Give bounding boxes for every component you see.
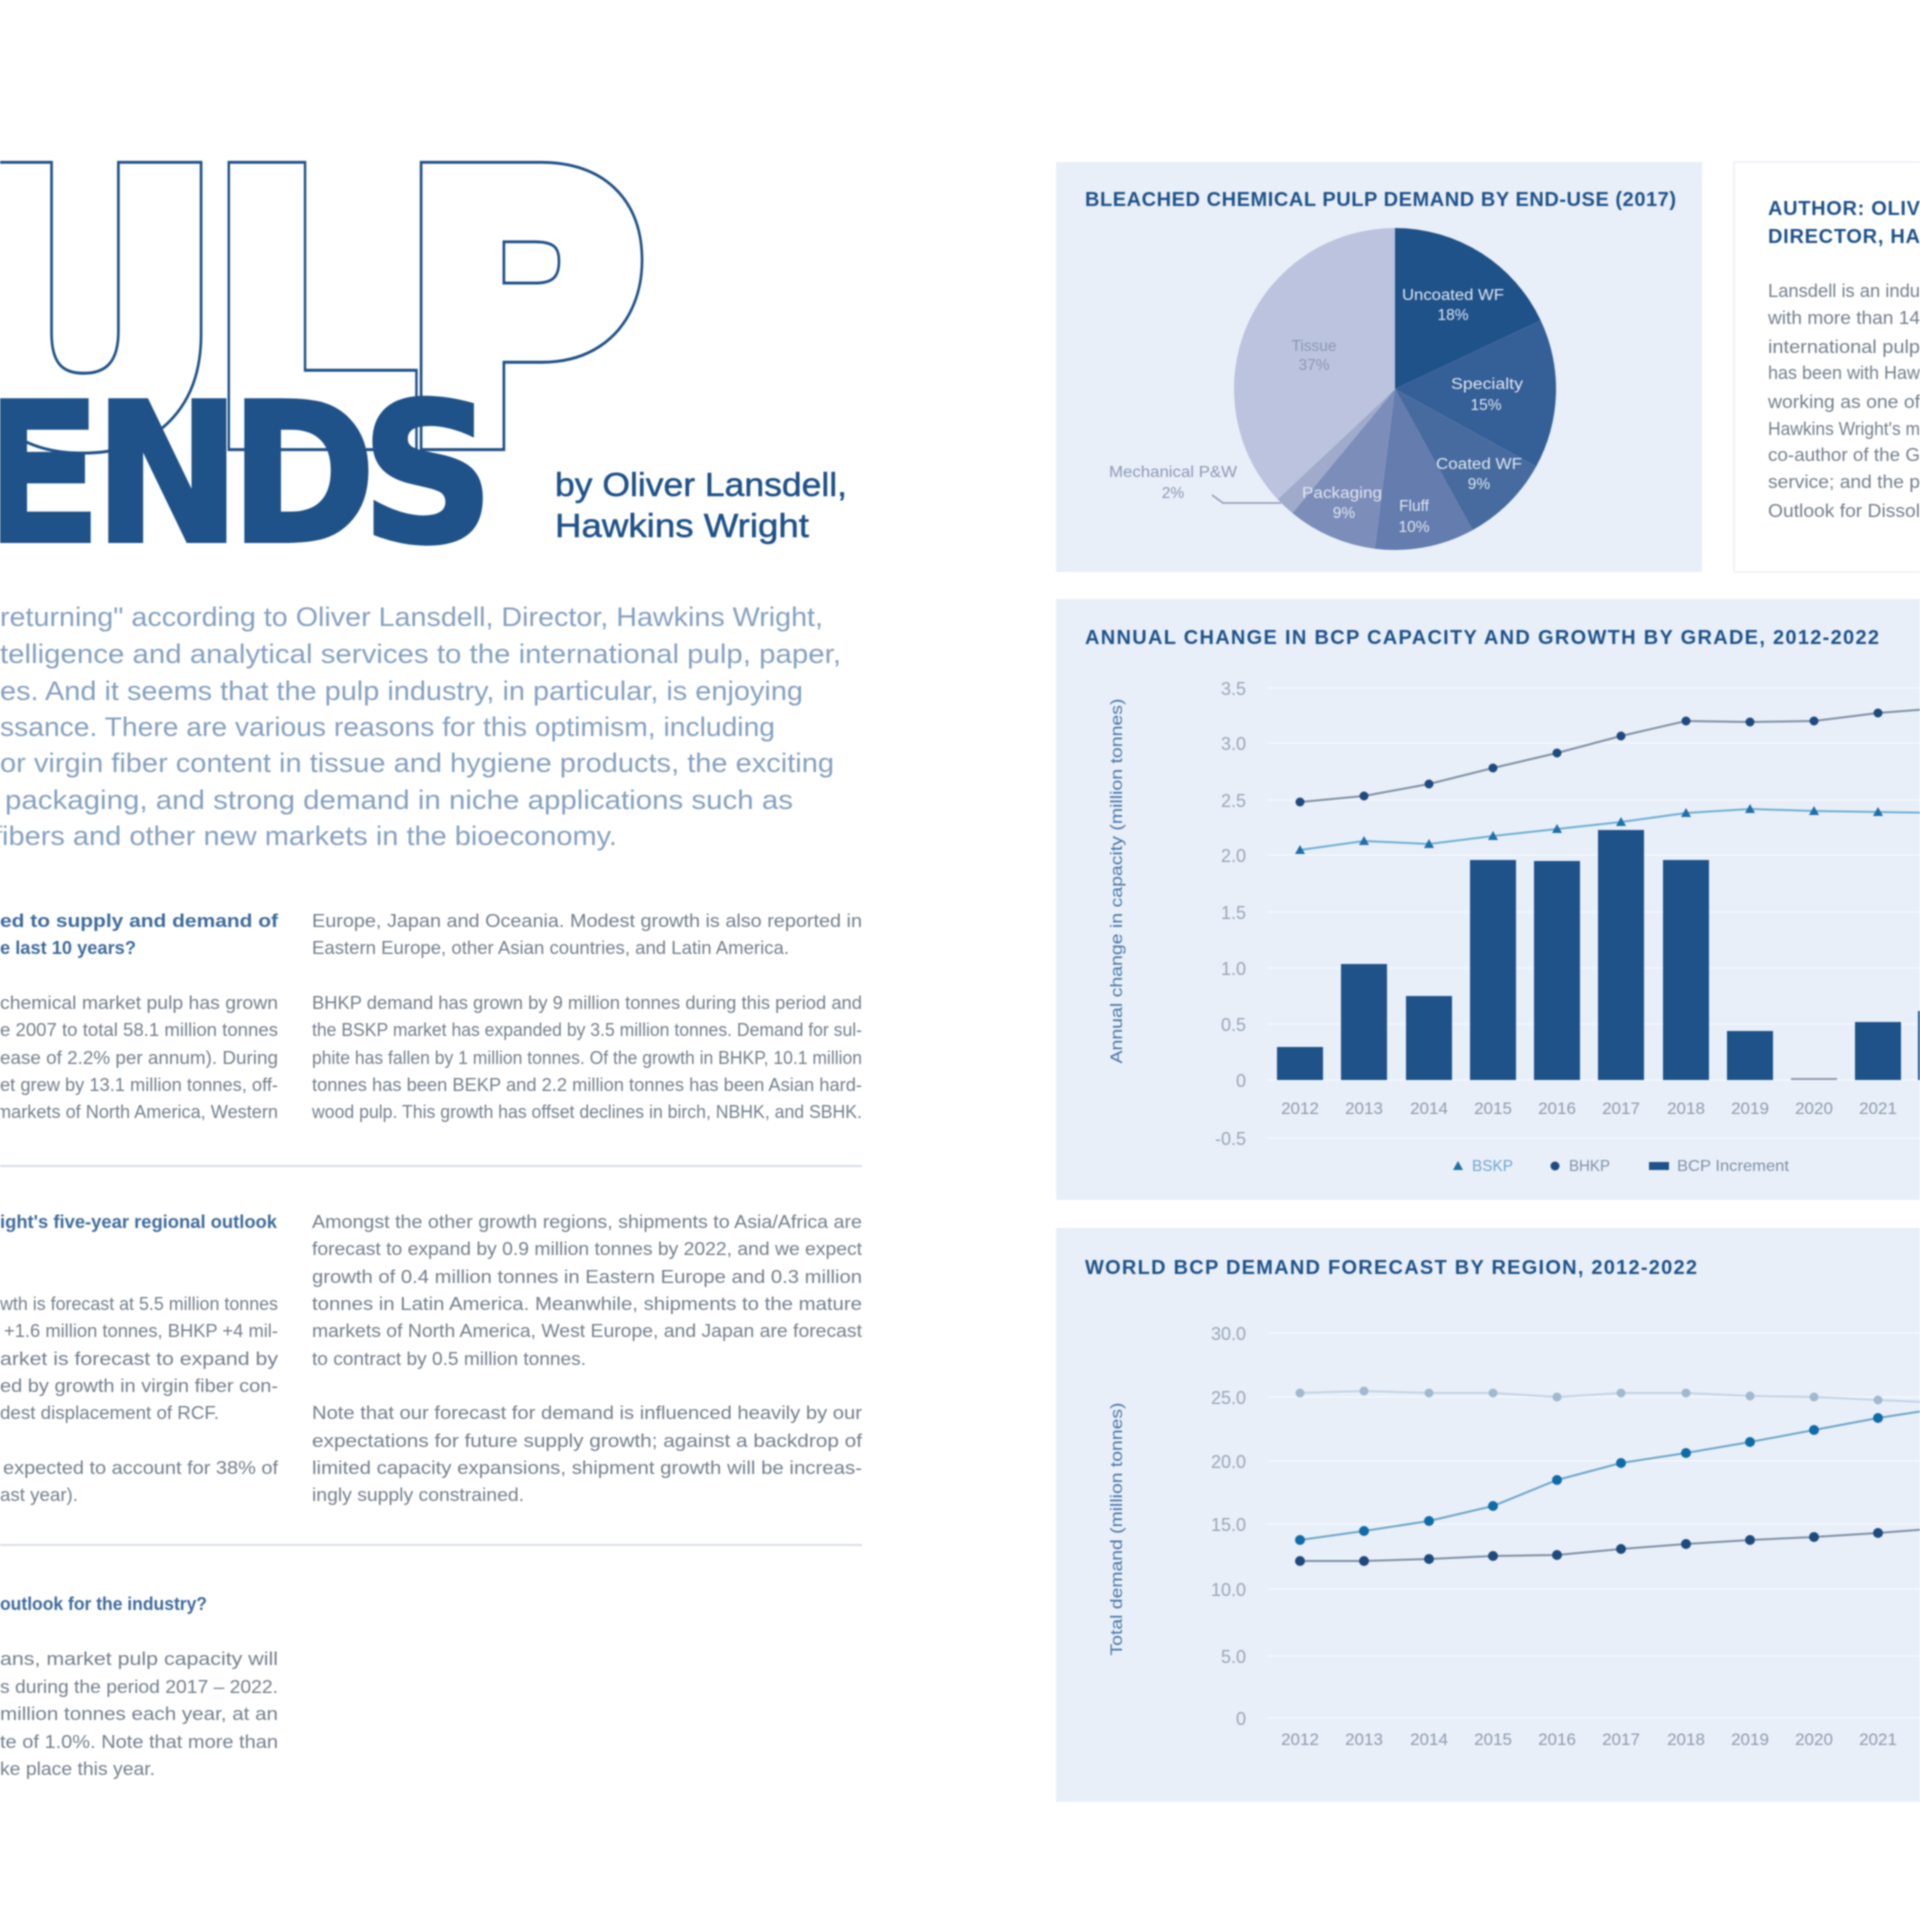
byline — [555, 466, 847, 544]
x axis labels: 2018 — [1667, 1730, 1705, 1749]
section 2 right column: growth of 0.4 million tonnes in Eastern Europe and 0.3 million — [312, 1267, 862, 1287]
intro paragraph: telligence and analytical services to the international pulp, paper, — [0, 639, 841, 669]
y axis labels — [1215, 679, 1246, 1149]
panel: author — [1734, 162, 1920, 572]
panel: pie chart — [1056, 162, 1702, 572]
author text: working as one of — [1767, 392, 1920, 412]
author text: co-author of the G — [1768, 445, 1920, 465]
pie labels: Fluff — [1399, 498, 1430, 515]
pie labels: Specialty — [1451, 376, 1523, 393]
title: outlined word: L — [225, 105, 409, 507]
author text — [1767, 281, 1920, 521]
y axis labels: 15.0 — [1211, 1515, 1246, 1535]
section 2 right column: limited capacity expansions, shipment growth will be increas- — [312, 1458, 862, 1478]
author heading: DIRECTOR, HA — [1768, 226, 1920, 248]
section 2 right column: tonnes in Latin America. Meanwhile, shipments to the mature — [312, 1294, 862, 1314]
title: solid word: D — [230, 362, 376, 587]
dark line — [1295, 1528, 1920, 1566]
author text: has been with Haw — [1768, 363, 1920, 383]
x axis labels — [1281, 1730, 1897, 1749]
x axis labels: 2019 — [1731, 1730, 1769, 1749]
y axis labels: 0 — [1236, 1709, 1246, 1729]
pie labels — [1109, 287, 1523, 536]
title: outlined word — [0, 103, 635, 507]
title: outlined word: P — [417, 103, 635, 506]
light line — [1296, 1386, 1920, 1404]
section 1 right column: BHKP demand has grown by 9 million tonnes during this period and — [312, 993, 862, 1013]
section 2 left column: +1.6 million tonnes, BHKP +4 mil- — [4, 1321, 278, 1341]
legend: BSKP — [1472, 1158, 1513, 1175]
x axis labels: 2012 — [1281, 1730, 1319, 1749]
x axis labels: 2015 — [1474, 1730, 1512, 1749]
pie labels: 10% — [1398, 519, 1430, 536]
x axis labels: 2015 — [1474, 1099, 1512, 1118]
section 2 right column: forecast to expand by 0.9 million tonnes by 2022, and we expect — [312, 1239, 862, 1259]
section 1 right column — [311, 911, 862, 1122]
section 2 left column: expected to account for 38% of — [3, 1458, 279, 1478]
y axis labels: 0.5 — [1221, 1015, 1246, 1035]
y axis labels: 20.0 — [1211, 1452, 1246, 1472]
x axis labels: 2020 — [1795, 1099, 1833, 1118]
y axis labels: 5.0 — [1221, 1647, 1246, 1667]
author text: service; and the p — [1768, 472, 1920, 492]
section 1 right column: tonnes has been BEKP and 2.2 million tonnes has been Asian hard- — [312, 1075, 862, 1095]
section 2 right column: ingly supply constrained. — [312, 1485, 524, 1505]
pie labels: Mechanical P&W — [1109, 464, 1237, 481]
section 1 left column: ease of 2.2% per annum). During — [0, 1048, 278, 1068]
legend: BCP Increment — [1677, 1158, 1790, 1175]
bars — [1277, 830, 1920, 1080]
y axis title: Annual change in capacity (million tonnes) — [1107, 698, 1126, 1064]
pie heading: BLEACHED CHEMICAL PULP DEMAND BY END-USE (2017) — [1085, 189, 1676, 211]
title: outlined word: P — [417, 103, 635, 506]
x axis labels: 2020 — [1795, 1730, 1833, 1749]
x axis labels: 2019 — [1731, 1099, 1769, 1118]
y axis labels: 3.0 — [1221, 734, 1246, 754]
author heading: AUTHOR: OLIV — [1768, 198, 1920, 220]
mid line — [1295, 1408, 1920, 1545]
intro paragraph: fibers and other new markets in the bioeconomy. — [0, 821, 617, 851]
section 1 left column: et grew by 13.1 million tonnes, off- — [0, 1075, 278, 1095]
x axis labels: 2012 — [1281, 1099, 1319, 1118]
section 1 right column: Eastern Europe, other Asian countries, and Latin America. — [312, 938, 789, 958]
y axis title: Total demand (million tonnes) — [1107, 1402, 1126, 1656]
y axis labels: -0.5 — [1215, 1129, 1246, 1149]
section 2 left column: dest displacement of RCF. — [0, 1403, 219, 1423]
intro paragraph: or virgin fiber content in tissue and hygiene products, the exciting — [0, 748, 834, 778]
section 1 left column — [0, 911, 279, 1122]
pie labels: Tissue — [1291, 338, 1337, 355]
section 1 left column: markets of North America, Western — [0, 1102, 278, 1122]
byline: by Oliver Lansdell, — [555, 466, 847, 503]
section 3 left column: ans, market pulp capacity will — [0, 1649, 278, 1669]
section 1 left column: chemical market pulp has grown — [0, 993, 278, 1013]
title: solid word: S — [361, 361, 494, 587]
section 3 left column: million tonnes each year, at an — [0, 1704, 278, 1724]
intro paragraph — [0, 602, 841, 851]
x axis labels: 2021 — [1859, 1730, 1897, 1749]
pie labels: 9% — [1468, 476, 1490, 493]
title: solid word: N — [94, 363, 241, 587]
section 2 right column: Amongst the other growth regions, shipments to Asia/Africa are — [312, 1212, 862, 1232]
x axis labels: 2013 — [1345, 1099, 1383, 1118]
capacity heading: ANNUAL CHANGE IN BCP CAPACITY AND GROWTH BY GRADE, 2012-2022 — [1085, 627, 1879, 649]
panel: capacity chart — [1056, 599, 1920, 1200]
pie labels: Packaging — [1302, 485, 1382, 502]
x axis labels — [1281, 1099, 1897, 1118]
section 1 left column: ed to supply and demand of — [0, 911, 279, 931]
author text: with more than 14 — [1767, 308, 1920, 328]
y axis labels — [1211, 1324, 1246, 1729]
x axis labels: 2017 — [1602, 1730, 1640, 1749]
section 2 right column: Note that our forecast for demand is influenced heavily by our — [312, 1403, 862, 1423]
y axis labels: 0 — [1236, 1071, 1246, 1091]
author text: Outlook for Dissol — [1768, 501, 1920, 521]
section 3 left column — [0, 1594, 278, 1779]
pie slices — [1234, 228, 1556, 550]
section 2 left column: wth is forecast at 5.5 million tonnes — [0, 1294, 278, 1314]
x axis labels: 2014 — [1410, 1730, 1448, 1749]
pie labels: 9% — [1333, 505, 1355, 522]
x axis labels: 2018 — [1667, 1099, 1705, 1118]
section 1 left column: e last 10 years? — [0, 938, 136, 958]
author text: international pulp — [1768, 337, 1920, 357]
leader line — [1212, 495, 1281, 503]
y axis labels: 2.5 — [1221, 791, 1246, 811]
x axis labels: 2016 — [1538, 1099, 1576, 1118]
section 1 right column: the BSKP market has expanded by 3.5 million tonnes. Demand for sul- — [312, 1020, 862, 1040]
section 1 right column: Europe, Japan and Oceania. Modest growth is also reported in — [312, 911, 862, 931]
section 3 left column: s during the period 2017 – 2022. — [0, 1677, 278, 1697]
pie labels: 18% — [1437, 307, 1469, 324]
author heading — [1768, 198, 1920, 248]
pie labels: 15% — [1470, 397, 1502, 414]
x axis labels: 2016 — [1538, 1730, 1576, 1749]
pie labels: 2% — [1162, 485, 1184, 502]
panel: demand chart — [1056, 1228, 1920, 1802]
x axis labels: 2017 — [1602, 1099, 1640, 1118]
x axis labels: 2013 — [1345, 1730, 1383, 1749]
x axis labels: 2014 — [1410, 1099, 1448, 1118]
section 1 right column: phite has fallen by 1 million tonnes. Of the growth in BHKP, 10.1 million — [312, 1048, 862, 1068]
legend — [1453, 1158, 1790, 1175]
y axis labels: 2.0 — [1221, 846, 1246, 866]
legend: BHKP — [1569, 1158, 1610, 1175]
pie labels: Uncoated WF — [1402, 287, 1504, 304]
y axis labels: 10.0 — [1211, 1580, 1246, 1600]
demand heading: WORLD BCP DEMAND FORECAST BY REGION, 2012-2022 — [1085, 1257, 1697, 1279]
section 2 left column — [0, 1212, 279, 1505]
section 3 left column: outlook for the industry? — [0, 1594, 207, 1614]
section 2 left column: ed by growth in virgin fiber con- — [0, 1376, 278, 1396]
title: outlined word: L — [225, 105, 409, 507]
intro paragraph: es. And it seems that the pulp industry, in particular, is enjoying — [0, 676, 803, 706]
y axis labels: 3.5 — [1221, 679, 1246, 699]
section 3 left column: te of 1.0%. Note that more than — [0, 1732, 278, 1752]
section 2 left column: ight's five-year regional outlook — [0, 1212, 278, 1232]
author text: Lansdell is an indu — [1768, 281, 1920, 301]
title: solid word — [0, 361, 494, 587]
section 2 right column: expectations for future supply growth; against a backdrop of — [312, 1431, 863, 1451]
BHKP line — [1296, 708, 1920, 806]
intro paragraph: returning" according to Oliver Lansdell, Director, Hawkins Wright, — [0, 602, 823, 632]
section 2 left column: arket is forecast to expand by — [0, 1349, 278, 1369]
byline: Hawkins Wright — [555, 507, 809, 544]
section 2 right column: markets of North America, West Europe, and Japan are forecast — [312, 1321, 862, 1341]
y axis labels: 30.0 — [1211, 1324, 1246, 1344]
intro paragraph: ssance. There are various reasons for this optimism, including — [0, 712, 775, 742]
section 1 left column: e 2007 to total 58.1 million tonnes — [0, 1020, 278, 1040]
BSKP line — [1295, 804, 1920, 854]
section 1 right column: wood pulp. This growth has offset declines in birch, NBHK, and SBHK. — [311, 1102, 862, 1122]
y axis labels: 25.0 — [1211, 1388, 1246, 1408]
y axis labels: 1.0 — [1221, 959, 1246, 979]
y axis labels: 1.5 — [1221, 903, 1246, 923]
x axis labels: 2021 — [1859, 1099, 1897, 1118]
intro paragraph: packaging, and strong demand in niche applications such as — [5, 785, 793, 815]
section 2 right column — [312, 1212, 863, 1505]
pie labels: Coated WF — [1436, 456, 1522, 473]
pie labels: 37% — [1298, 357, 1330, 374]
section 2 right column: to contract by 0.5 million tonnes. — [312, 1349, 586, 1369]
section 2 left column: ast year). — [0, 1485, 78, 1505]
section 3 left column: ke place this year. — [0, 1759, 155, 1779]
